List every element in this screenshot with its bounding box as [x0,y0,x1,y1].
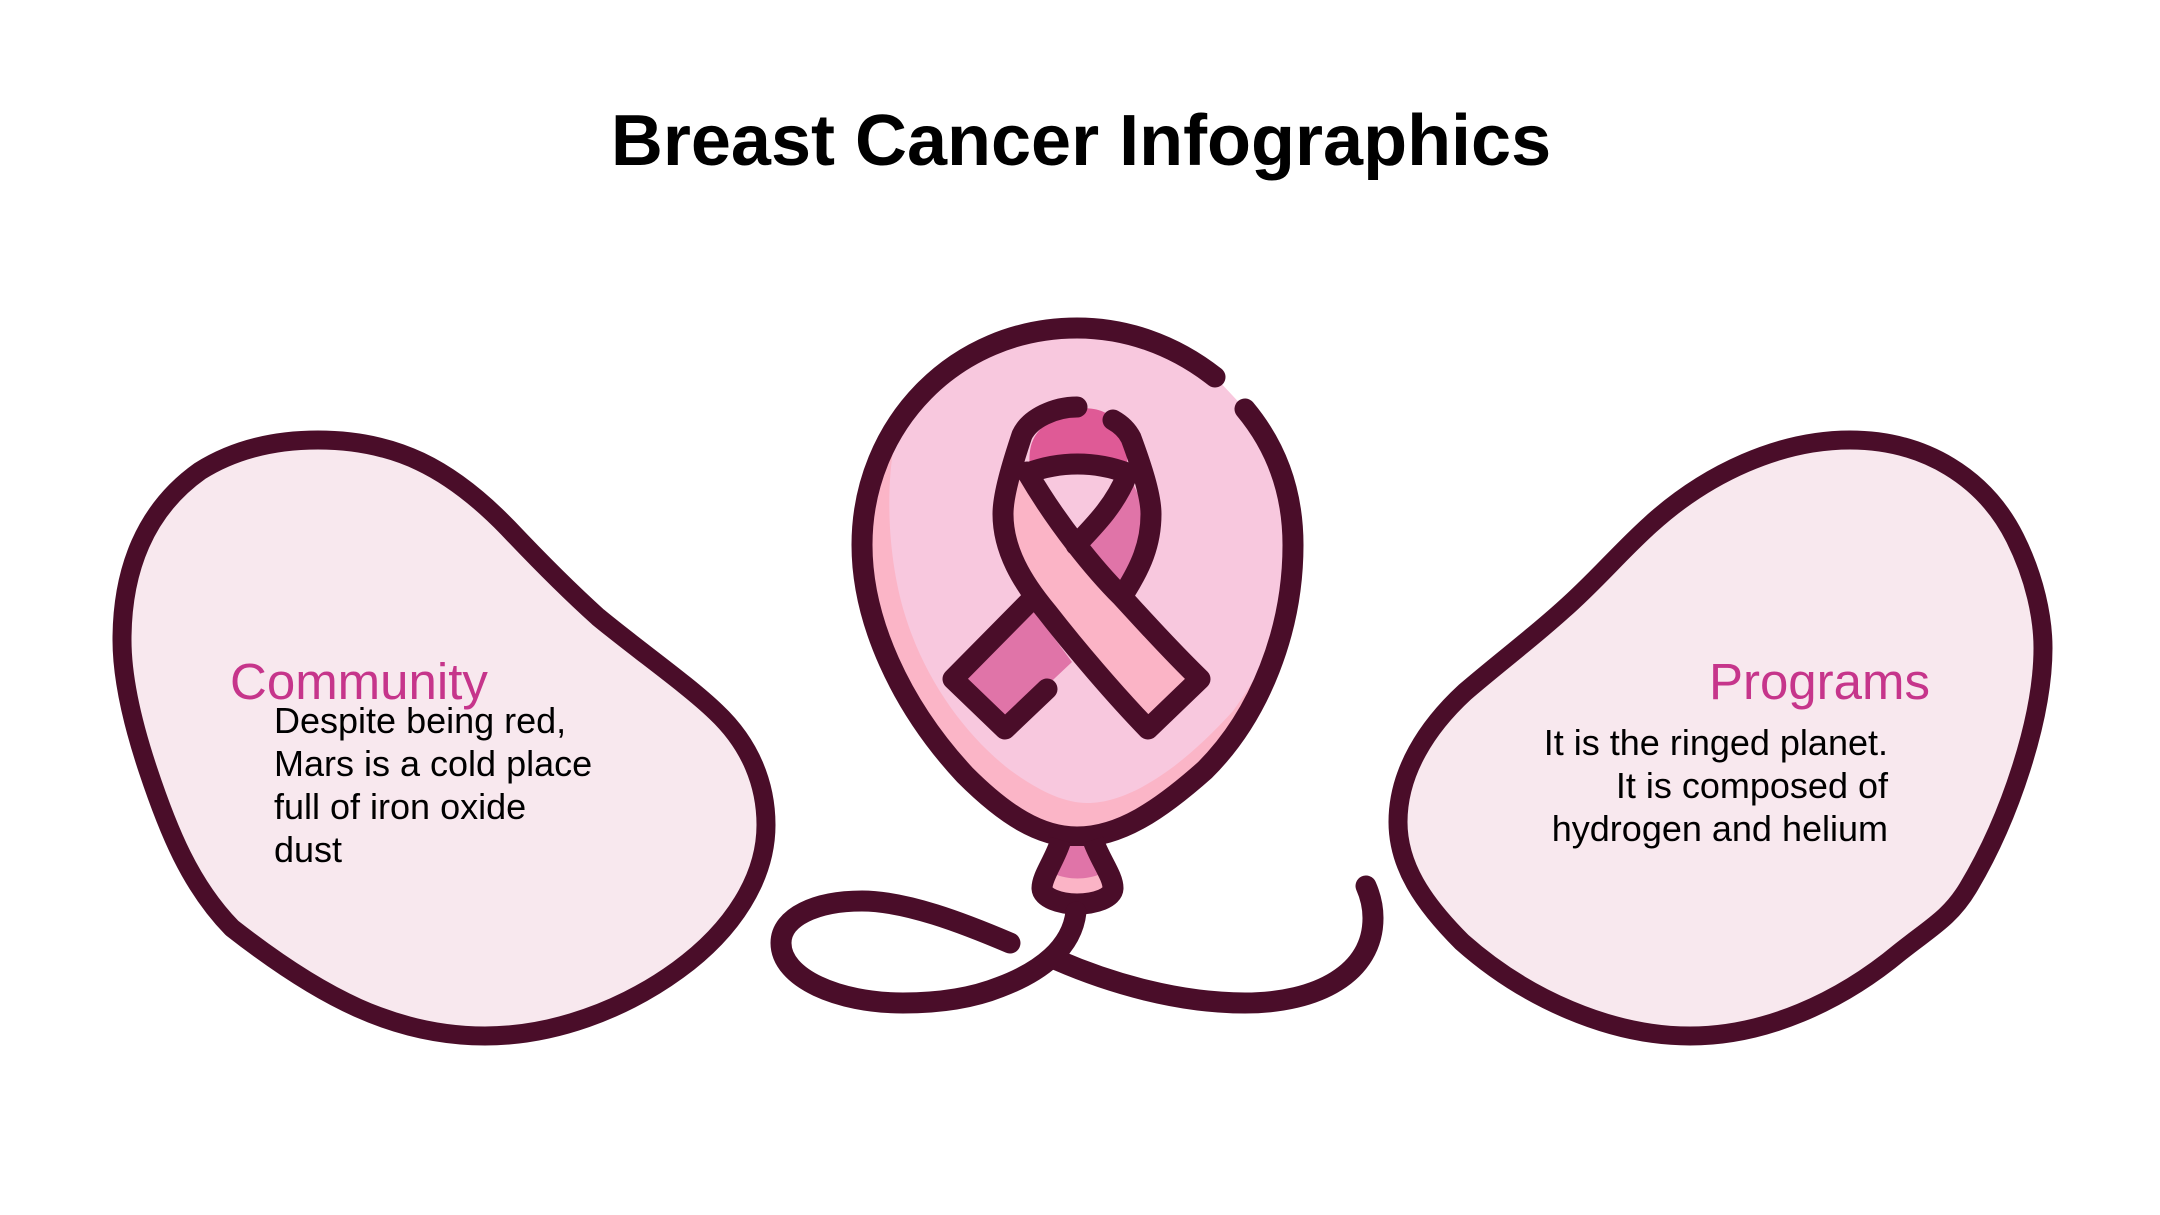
knot fill light [1048,874,1108,898]
heading: community: Community [230,653,488,710]
text: community description: full of iron oxide [274,786,526,827]
text: community description: Despite being red, [274,700,566,741]
balloon outline [862,328,1293,837]
text: community description: dust [274,829,342,870]
balloon string [781,886,1373,1003]
ribbon back fill right [1080,478,1148,592]
text: programs description: It is composed of [1616,765,1889,806]
heading: programs: Programs [1709,653,1930,710]
knot outline [1042,840,1113,904]
panel: community [122,440,766,1036]
title: Breast Cancer Infographics [611,101,1551,181]
blob: programs background [1398,440,2043,1036]
text: programs description: It is the ringed planet. [1544,722,1888,763]
ribbon front band fill [1003,470,1200,729]
text: programs description: hydrogen and helium [1552,808,1888,849]
panel: programs [1398,440,2043,1036]
knot fill dark [1054,846,1101,879]
ribbon outline [953,407,1200,729]
balloon shadow fill [862,328,1293,837]
ribbon loop top fill [1030,408,1128,472]
ribbon back fill left tail [960,608,1072,725]
icon: balloon with ribbon [781,328,1373,1003]
blob: community background [122,440,766,1036]
text: community description: Mars is a cold place [274,743,592,784]
balloon knot [1042,840,1113,904]
balloon light fill [889,328,1293,803]
